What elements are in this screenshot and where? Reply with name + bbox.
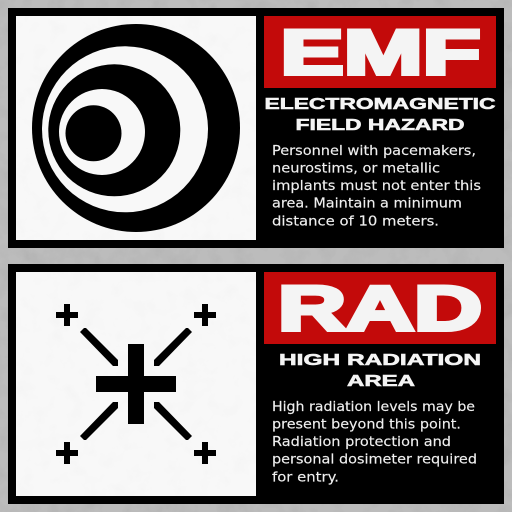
panel: RAD sign	[8, 264, 504, 504]
panel: EMF sign	[8, 8, 504, 248]
RAD body text: personal dosimeter required	[272, 453, 477, 468]
RAD body text: Radiation protection and	[272, 435, 451, 450]
RAD red banner	[264, 272, 496, 344]
EMF heading: ELECTROMAGNETIC	[264, 96, 496, 113]
RAD body text: High radiation levels may be	[272, 400, 475, 415]
EMF body text	[272, 144, 481, 230]
RAD body text	[272, 400, 477, 486]
RAD body text: for entry.	[272, 470, 339, 486]
EMF body text: neurostims, or metallic	[272, 162, 440, 176]
RAD body text: present beyond this point.	[272, 418, 461, 432]
RAD heading	[279, 352, 481, 390]
EMF red banner	[264, 16, 496, 88]
EMF heading: FIELD HAZARD	[296, 117, 464, 134]
RAD heading: AREA	[347, 373, 416, 390]
EMF body text: implants must not enter this	[272, 179, 481, 194]
EMF heading	[264, 96, 496, 134]
EMF body text: area. Maintain a minimum	[272, 197, 462, 212]
icon: EMF nested circles	[16, 16, 256, 240]
RAD heading: HIGH RADIATION	[279, 352, 481, 369]
RAD red banner: RAD	[278, 274, 482, 344]
EMF body text: Personnel with pacemakers,	[272, 144, 476, 159]
EMF red banner: EMF	[280, 18, 480, 88]
icon: radiation cross and rays	[16, 272, 256, 496]
EMF body text: distance of 10 meters.	[272, 214, 439, 230]
